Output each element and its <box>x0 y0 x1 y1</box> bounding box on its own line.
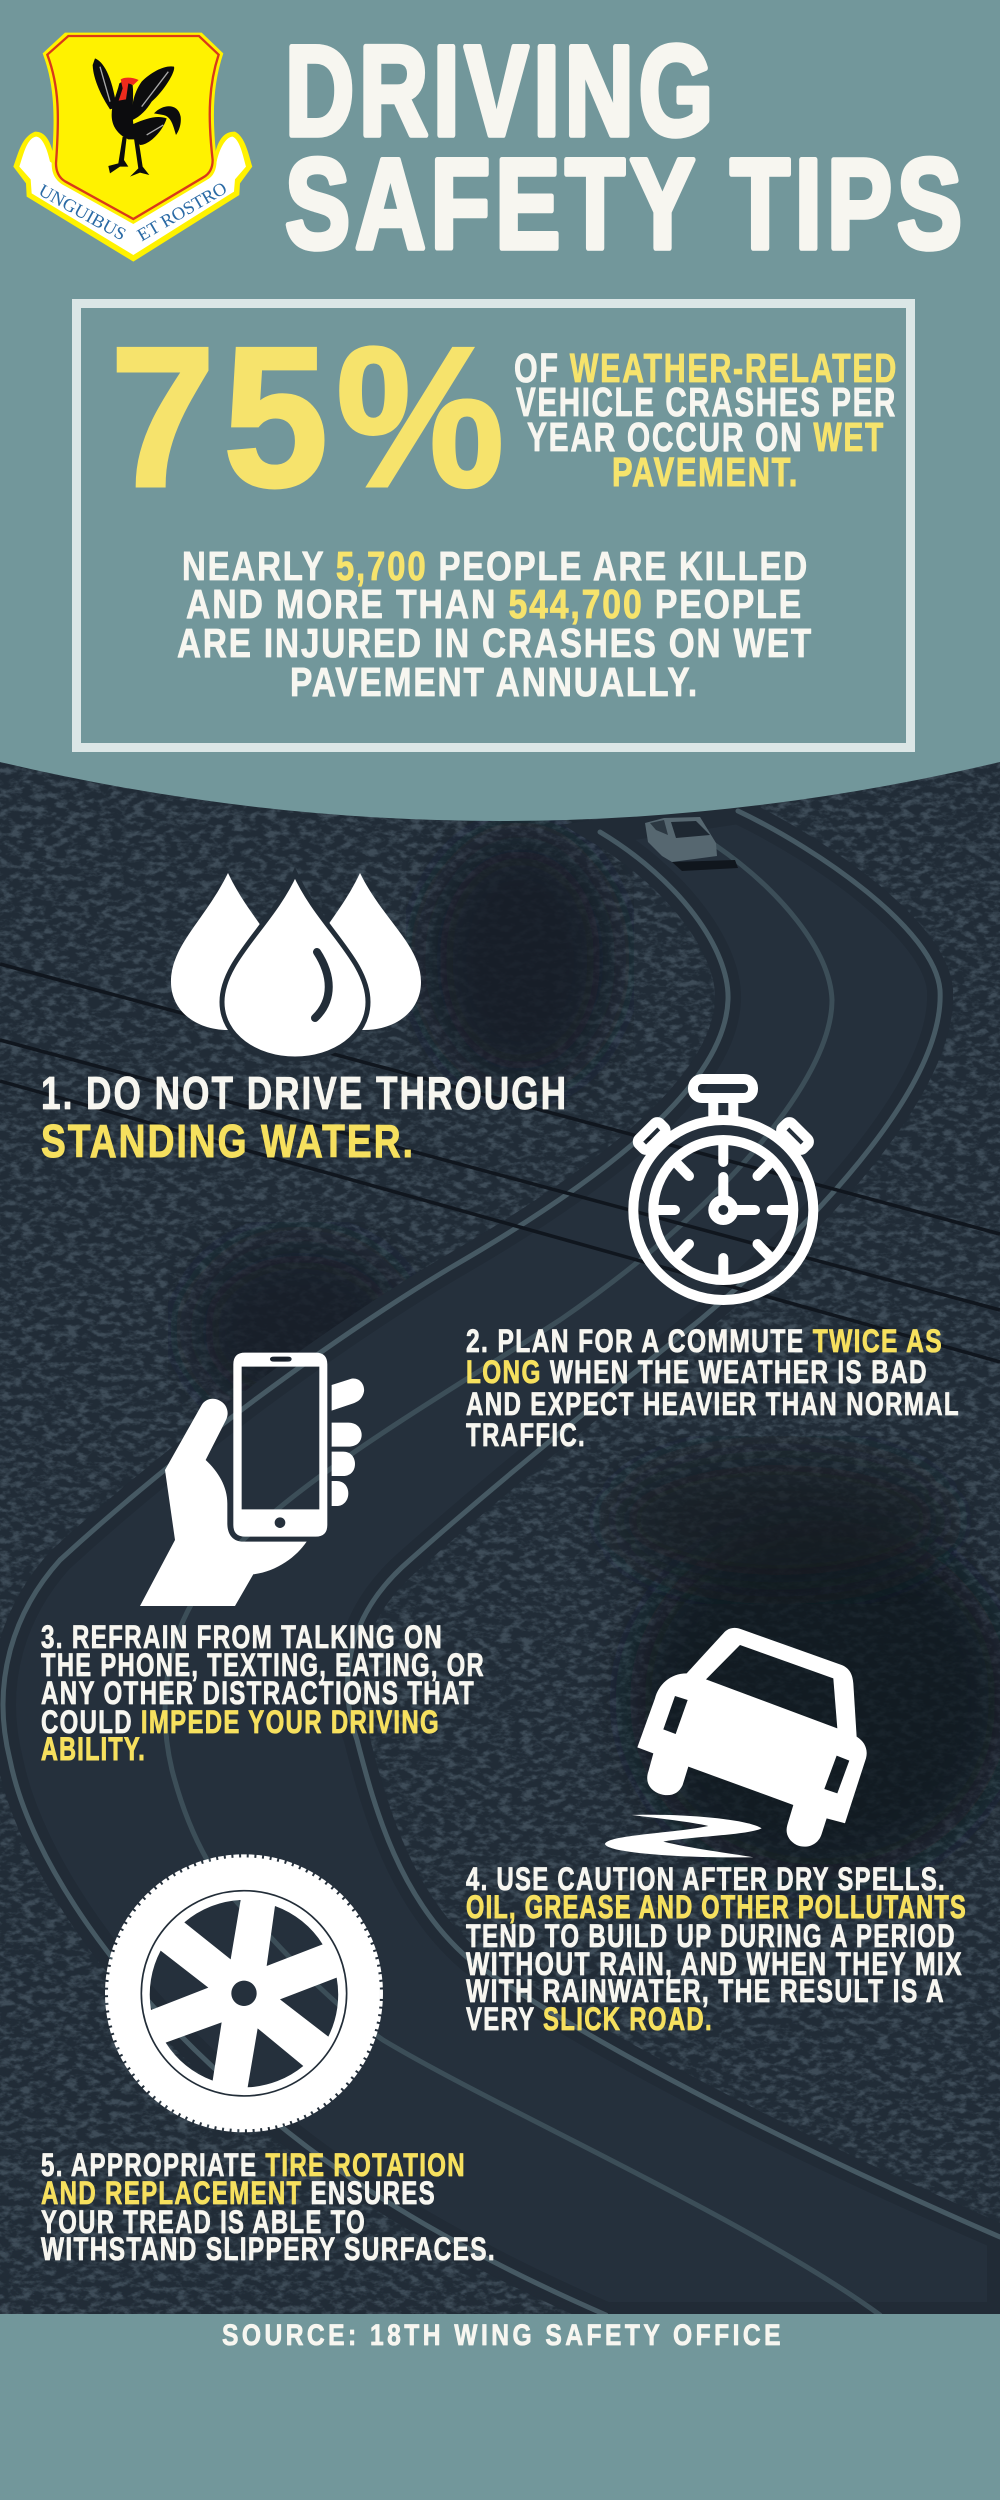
statistic text: killed and injured: NEARLY 5,700 PEOPLE ARE KILLED <box>182 543 809 589</box>
tip 3 text: ABILITY. <box>41 1731 146 1767</box>
statistic text: weather-related crashes: YEAR OCCUR ON WET <box>527 414 885 460</box>
logo: 18th Wing shield: ET ROSTRO <box>134 178 230 245</box>
icon: skidding car <box>605 1628 867 1857</box>
statistic text: killed and injured: ARE INJURED IN CRASHES ON WET <box>177 620 813 666</box>
panel: statistics box <box>76 304 910 748</box>
icon: stopwatch <box>633 1079 813 1300</box>
tip 4 text: VERY SLICK ROAD. <box>466 2001 713 2037</box>
title <box>285 20 967 276</box>
footer band <box>0 2314 1000 2500</box>
tip 3 text: 3. REFRAIN FROM TALKING ON <box>41 1619 443 1655</box>
title: DRIVING <box>285 20 718 163</box>
statistic text: weather-related crashes: OF WEATHER-RELATED <box>514 345 898 391</box>
tip 5 text: 5. APPROPRIATE TIRE ROTATION <box>41 2147 466 2183</box>
tip 5 text: YOUR TREAD IS ABLE TO <box>41 2204 366 2240</box>
icon: hand holding phone <box>140 1353 364 1606</box>
logo: 18th Wing shield <box>13 33 252 262</box>
tip 1 text: 1. DO NOT DRIVE THROUGH <box>41 1067 568 1119</box>
tip 3 text: ANY OTHER DISTRACTIONS THAT <box>41 1675 475 1711</box>
statistic text: killed and injured <box>177 543 813 705</box>
statistic text: weather-related crashes: PAVEMENT. <box>612 449 799 495</box>
distant car on road <box>645 817 738 871</box>
tip 3 text: THE PHONE, TEXTING, EATING, OR <box>41 1647 485 1683</box>
tip 5 text <box>41 2147 496 2267</box>
tip 3 text: COULD IMPEDE YOUR DRIVING <box>41 1704 440 1740</box>
background photo: winding road <box>0 762 1000 2315</box>
icon: water drops <box>171 873 421 1059</box>
big number: 75%: 75% <box>110 306 512 529</box>
tip 1 text <box>41 1067 568 1167</box>
tip 4 text <box>466 1861 967 2037</box>
motto text: UNGUIBUS <box>35 180 130 244</box>
tip 5 text: AND REPLACEMENT ENSURES <box>41 2175 436 2211</box>
tip 3 text <box>41 1619 485 1767</box>
tip 2 text: 2. PLAN FOR A COMMUTE TWICE AS <box>466 1323 943 1359</box>
header curve <box>0 755 1000 821</box>
tip 5 text: WITHSTAND SLIPPERY SURFACES. <box>41 2231 496 2267</box>
tip 1 text: STANDING WATER. <box>41 1115 415 1167</box>
tip 2 text <box>466 1323 960 1453</box>
statistic text: killed and injured: PAVEMENT ANNUALLY. <box>290 659 699 705</box>
tip 2 text: TRAFFIC. <box>466 1417 586 1453</box>
statistic text: weather-related crashes <box>514 345 898 495</box>
rooster <box>93 58 181 177</box>
source line: SOURCE: 18TH WING SAFETY OFFICE <box>222 2319 784 2352</box>
statistic text: killed and injured: AND MORE THAN 544,700 PEOPLE <box>186 581 803 627</box>
icon: tire <box>107 1856 381 2131</box>
